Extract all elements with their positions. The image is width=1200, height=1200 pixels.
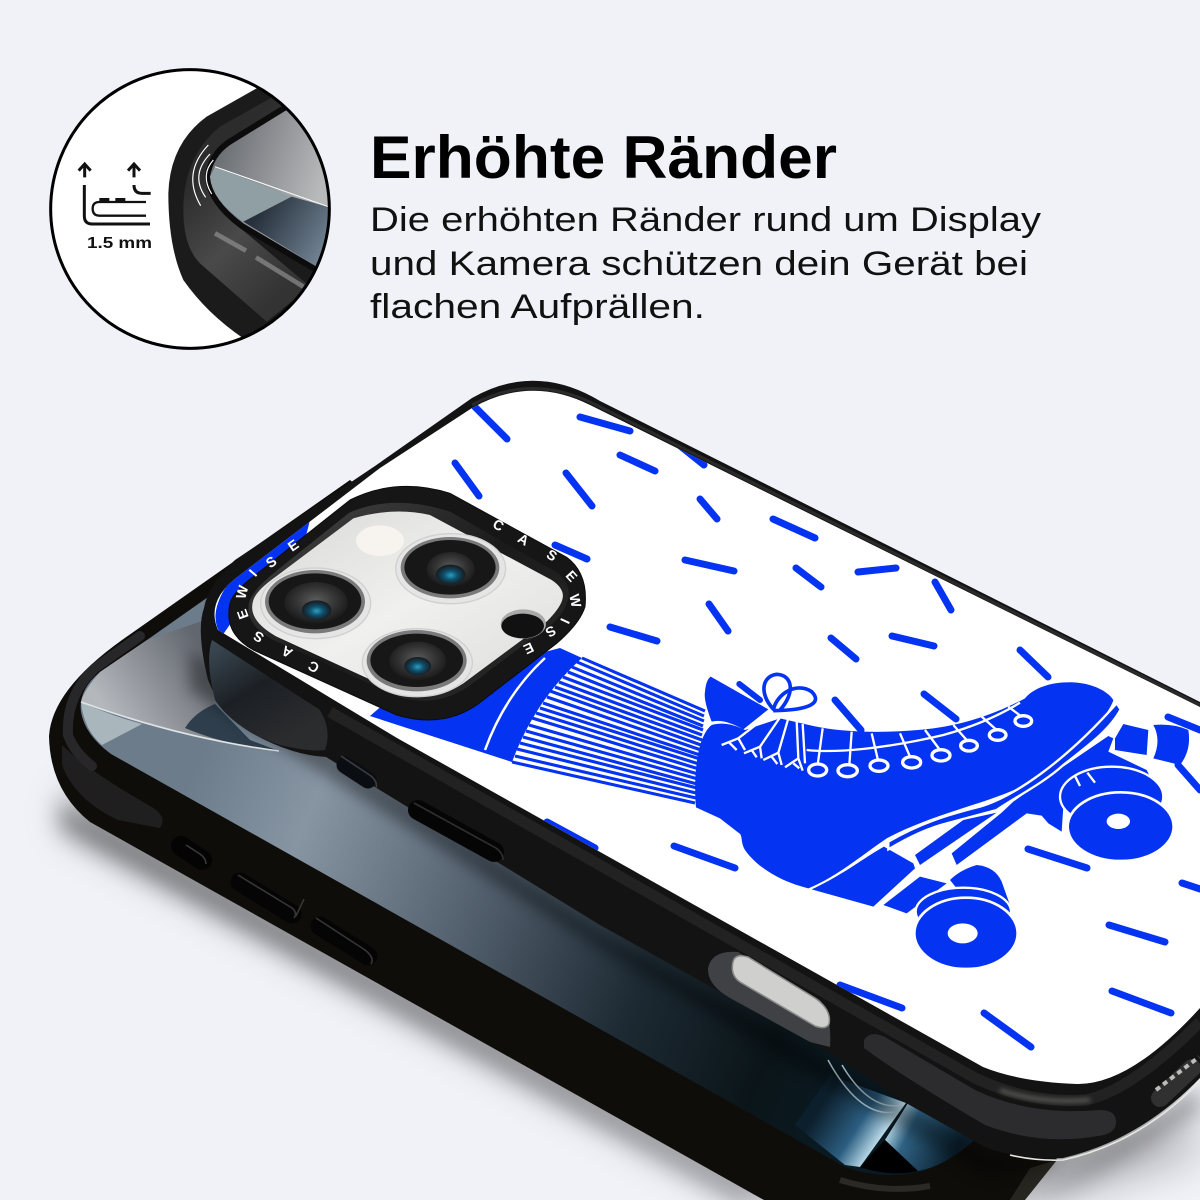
screen gray <box>210 110 333 267</box>
carbon patch bottom <box>864 1034 1116 1139</box>
bezel lettering: E <box>521 639 536 658</box>
lower phone inner rim highlight <box>68 636 140 766</box>
rim highlight along print <box>472 388 1200 705</box>
bezel lettering: C <box>305 658 322 676</box>
screen curve line <box>81 702 279 751</box>
title: Erhöhte Ränder <box>370 124 837 191</box>
bezel lettering: E <box>234 607 252 621</box>
bezel lettering: E <box>563 567 581 585</box>
side switch <box>341 756 376 788</box>
rear wheel hub <box>950 865 1010 905</box>
camera bezel <box>229 486 585 720</box>
bezel lettering: S <box>543 622 559 641</box>
1.5 mm label: 1.5 mm <box>87 235 152 252</box>
bezel lettering <box>232 516 585 676</box>
inset phone corner <box>168 88 328 337</box>
glass edge line <box>215 167 328 207</box>
camera inner ledge <box>248 503 569 701</box>
bezel lettering: W <box>566 593 585 610</box>
sock ribbing <box>512 658 705 803</box>
bezel lettering: S <box>544 546 560 564</box>
screen gray reflection <box>81 620 279 751</box>
description: und Kamera schützen dein Gerät bei <box>370 245 1028 283</box>
rear wheel back <box>915 886 1010 918</box>
description: flachen Aufprällen. <box>370 288 705 326</box>
screen light ray right <box>885 1103 985 1171</box>
circle background <box>51 70 329 348</box>
bezel lettering: W <box>232 583 251 600</box>
bezel lettering: I <box>557 616 573 626</box>
white edge line <box>1010 1081 1200 1160</box>
edge sheen <box>215 233 303 287</box>
bezel lettering: E <box>285 536 302 554</box>
inner black lip <box>208 108 315 268</box>
lace lines <box>818 707 1022 765</box>
bezel lettering: S <box>263 553 280 571</box>
raised edge icon <box>79 164 151 224</box>
bottom rim gloss <box>330 712 1200 1101</box>
case corner lighter band <box>183 97 310 322</box>
upper phone shadow on lower phone <box>190 650 1060 1178</box>
charging port surround <box>708 952 830 1047</box>
lens left <box>261 568 371 639</box>
screen dark <box>244 196 328 266</box>
notch black triangle <box>860 1140 918 1173</box>
lower phone screen <box>81 490 985 1175</box>
sock solid band <box>370 648 582 762</box>
rim sheen highlight <box>1000 1090 1090 1101</box>
lens bottom <box>362 629 472 697</box>
lace bow <box>764 674 816 711</box>
carbon patch camera side <box>209 640 328 750</box>
camera glass <box>252 512 563 697</box>
volume up button <box>238 875 304 918</box>
toe stop <box>1153 725 1189 765</box>
front wheel hole <box>1107 814 1130 829</box>
skate heel <box>812 847 915 907</box>
lower phone speaker <box>1010 1160 1057 1200</box>
skate sole strip <box>888 703 1121 849</box>
roller skate illustration <box>695 674 1189 969</box>
collar stitch line <box>807 703 1020 751</box>
skate plate <box>915 813 997 865</box>
bezel lettering: A <box>515 530 532 549</box>
right side speaker holes <box>1156 1057 1199 1098</box>
flash <box>356 525 404 556</box>
confetti dashes <box>455 407 1200 1047</box>
bezel lettering: A <box>278 643 295 661</box>
screen dark notch <box>185 704 279 751</box>
bottom lace crossings <box>721 718 806 771</box>
phone shadow <box>60 786 1200 1200</box>
case back print <box>190 370 1200 1100</box>
circle outline <box>51 70 329 348</box>
blue crescent behind camera <box>215 520 310 636</box>
sock white line <box>485 658 545 750</box>
impact arcs <box>193 145 213 206</box>
camera module <box>229 486 585 720</box>
front wheel <box>1068 792 1174 861</box>
skate tongue strap <box>739 684 760 700</box>
screen light wedge <box>210 167 292 222</box>
skate tongue <box>705 677 768 729</box>
front wheel back <box>1058 766 1162 814</box>
description: Die erhöhten Ränder rund um Display <box>370 201 1041 239</box>
truck bolts <box>1075 773 1095 786</box>
lower phone left corner patch <box>62 745 162 828</box>
description <box>370 201 1041 326</box>
action button <box>181 845 206 864</box>
inset circle: raised edges detail <box>51 60 340 348</box>
charging port <box>732 956 829 1028</box>
skate truck plate <box>952 736 1158 865</box>
upper phone case body <box>201 381 1200 1160</box>
case corner dark <box>168 88 313 337</box>
white back plate <box>190 370 1200 1100</box>
rear truck <box>883 877 947 913</box>
screen light ray left <box>795 1075 906 1167</box>
lens top right <box>396 534 506 604</box>
rear wheel hole <box>948 923 978 943</box>
power button <box>414 803 503 860</box>
glass reflection arcs <box>828 1060 903 1113</box>
skate boot <box>695 682 1113 888</box>
lidar <box>501 609 546 639</box>
screen light wedge <box>81 702 142 745</box>
lower phone body <box>49 480 1057 1200</box>
volume down button <box>316 918 372 964</box>
eyelets <box>809 716 1032 777</box>
bezel lettering: S <box>250 628 267 646</box>
toe stop neck <box>1115 724 1148 755</box>
rear wheel <box>914 898 1018 969</box>
bottom rim sheen <box>840 1180 930 1189</box>
bezel lettering: C <box>490 516 507 534</box>
bezel lettering: I <box>245 566 260 579</box>
